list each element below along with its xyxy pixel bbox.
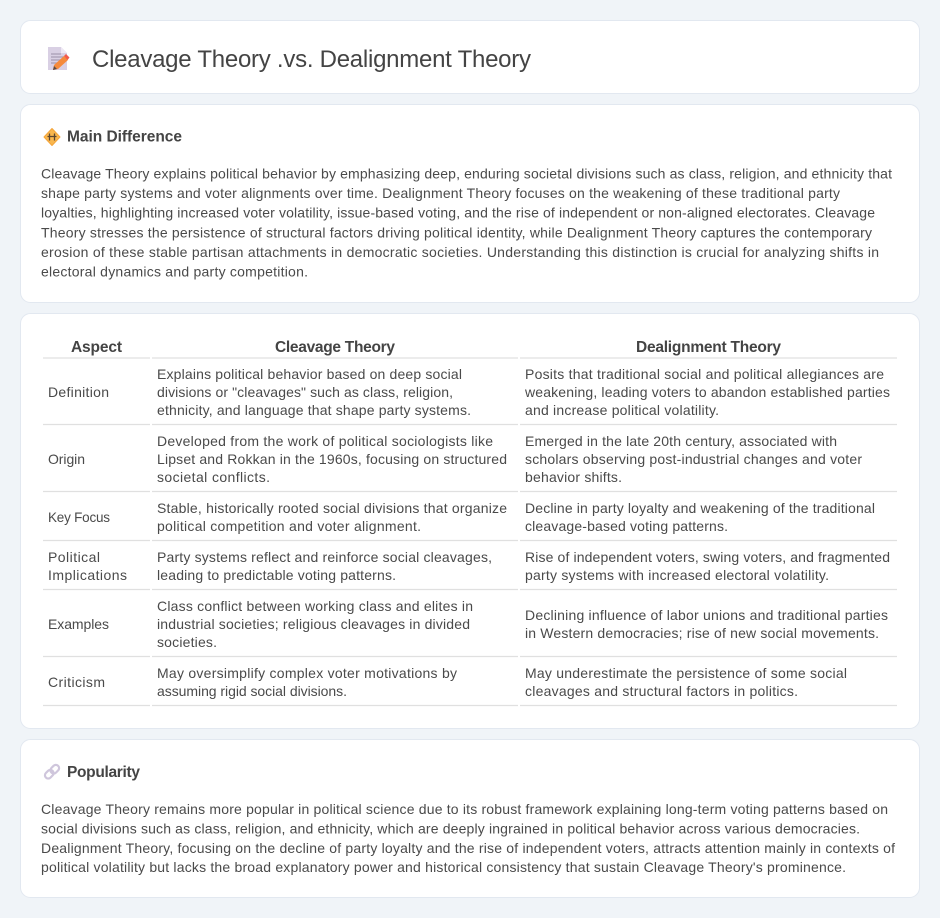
panel: comparison table — [20, 314, 920, 728]
text block: main difference paragraph: erosion of these stable partisan attachments in democratic societies. Understanding this distinction is crucial for analyzing shifts in — [41, 244, 879, 260]
row: key focus: Decline in party loyalty and weakening of the traditional — [525, 500, 875, 516]
row: criticism: May oversimplify complex voter motivations by — [157, 665, 457, 681]
row: examples: Class conflict between working class and elites in — [157, 598, 473, 614]
row: definition: and increase political volatility. — [525, 402, 719, 418]
icon: diamond road sign — [44, 128, 60, 146]
row: political implications: Rise of independent voters, swing voters, and fragmented — [525, 549, 890, 565]
text block: popularity paragraph: political volatility but lacks the broad explanatory power and historical consistency that sustain Cleavage Theory's prominence. — [41, 859, 846, 875]
row: political implications: Implications — [48, 567, 127, 583]
text block: main difference paragraph: electoral dynamics and party competition. — [41, 264, 308, 280]
row: examples: industrial societies; religious cleavages in divided — [157, 616, 470, 632]
row: criticism: cleavages and structural factors in politics. — [525, 683, 798, 699]
row: origin — [48, 433, 862, 485]
row: key focus: Stable, historically rooted social divisions that organize — [157, 500, 507, 516]
row: examples: in Western democracies; rise of new social movements. — [525, 625, 879, 641]
row: key focus — [48, 500, 875, 534]
row: key focus: cleavage-based voting patterns. — [525, 518, 728, 534]
row: criticism: assuming rigid social divisions. — [157, 683, 347, 699]
row: origin: scholars observing post-industrial changes and voter — [525, 451, 862, 467]
row: origin: Lipset and Rokkan in the 1960s, focusing on structured — [157, 451, 507, 467]
row: definition: weakening, leading voters to abandon established parties — [524, 384, 890, 400]
row: key focus: Key Focus — [48, 510, 110, 525]
table header row: Aspect — [71, 339, 122, 356]
row: origin: Emerged in the late 20th century, associated with — [525, 433, 837, 449]
row: political implications — [48, 549, 890, 583]
row: definition: Posits that traditional social and political allegiances are — [525, 366, 884, 382]
row: origin: behavior shifts. — [525, 469, 622, 485]
text block: main difference paragraph: Theory stresses the persistence of structural factors driving political identity, while Dealignment Theory captures the contemporary — [41, 224, 872, 240]
row: definition: Explains political behavior based on deep social — [157, 366, 462, 382]
row: examples: Declining influence of labor unions and traditional parties — [525, 607, 888, 623]
text block: popularity paragraph: Dealignment Theory, focusing on the decline of party loyalty and the rise of independent voters, attracts attention mainly in contexts of — [41, 840, 895, 856]
row: criticism — [48, 665, 847, 699]
row: criticism: May underestimate the persistence of some social — [525, 665, 847, 681]
row: political implications: leading to predictable voting patterns. — [157, 567, 396, 583]
table header row: Dealignment Theory — [636, 339, 781, 356]
row: political implications: Political — [48, 549, 100, 565]
panel: main difference — [20, 104, 920, 302]
row: definition: divisions or "cleavages" such as class, religion, — [157, 384, 453, 400]
row: examples: societies. — [157, 634, 217, 650]
row: key focus: political competition and voter alignment. — [157, 518, 421, 534]
row: origin: Origin — [48, 451, 85, 467]
table header row — [71, 339, 781, 356]
text block: main difference paragraph: loyalties, highlighting increased voter volatility, issue-based voting, and the rise of independent or non-aligned electorates. Cleavage — [41, 205, 875, 221]
text block: main difference paragraph — [41, 166, 892, 280]
row: examples: Examples — [48, 616, 109, 632]
row: origin: societal conflicts. — [157, 469, 270, 485]
row: definition: ethnicity, and language that shape party systems. — [157, 402, 471, 418]
icon: document with pencil — [48, 47, 70, 70]
panel: title header — [20, 20, 920, 94]
text block: popularity paragraph: Cleavage Theory remains more popular in political science due to its robust framework explaining long-term voting patterns based on — [41, 801, 888, 817]
text block: main difference paragraph: Cleavage Theory explains political behavior by emphasizing deep, enduring societal divisions such as class, religion, and ethnicity that — [41, 166, 892, 182]
row: origin: Developed from the work of political sociologists like — [157, 433, 493, 449]
row: political implications: party systems with increased electoral volatility. — [525, 567, 829, 583]
row: criticism: Criticism — [48, 674, 105, 690]
row: definition — [48, 366, 890, 418]
row: political implications: Party systems reflect and reinforce social cleavages, — [157, 549, 492, 565]
row: definition: Definition — [48, 384, 109, 400]
text block: main difference paragraph: shape party systems and voter alignments over time. Dealignment Theory focuses on the weakening of these traditional party — [41, 185, 840, 201]
panel: popularity — [20, 740, 920, 898]
title: Cleavage Theory .vs. Dealignment Theory — [92, 46, 531, 73]
heading: popularity: Popularity — [67, 764, 140, 781]
text block: popularity paragraph — [41, 801, 895, 875]
row: examples — [48, 598, 888, 650]
heading: main difference: Main Difference — [67, 128, 182, 146]
text block: popularity paragraph: social divisions such as class, religion, and ethnicity, which are deeply ingrained in political behavior across various democracies. — [41, 820, 860, 836]
table header row: Cleavage Theory — [275, 339, 395, 356]
icon: chain link — [44, 764, 60, 780]
